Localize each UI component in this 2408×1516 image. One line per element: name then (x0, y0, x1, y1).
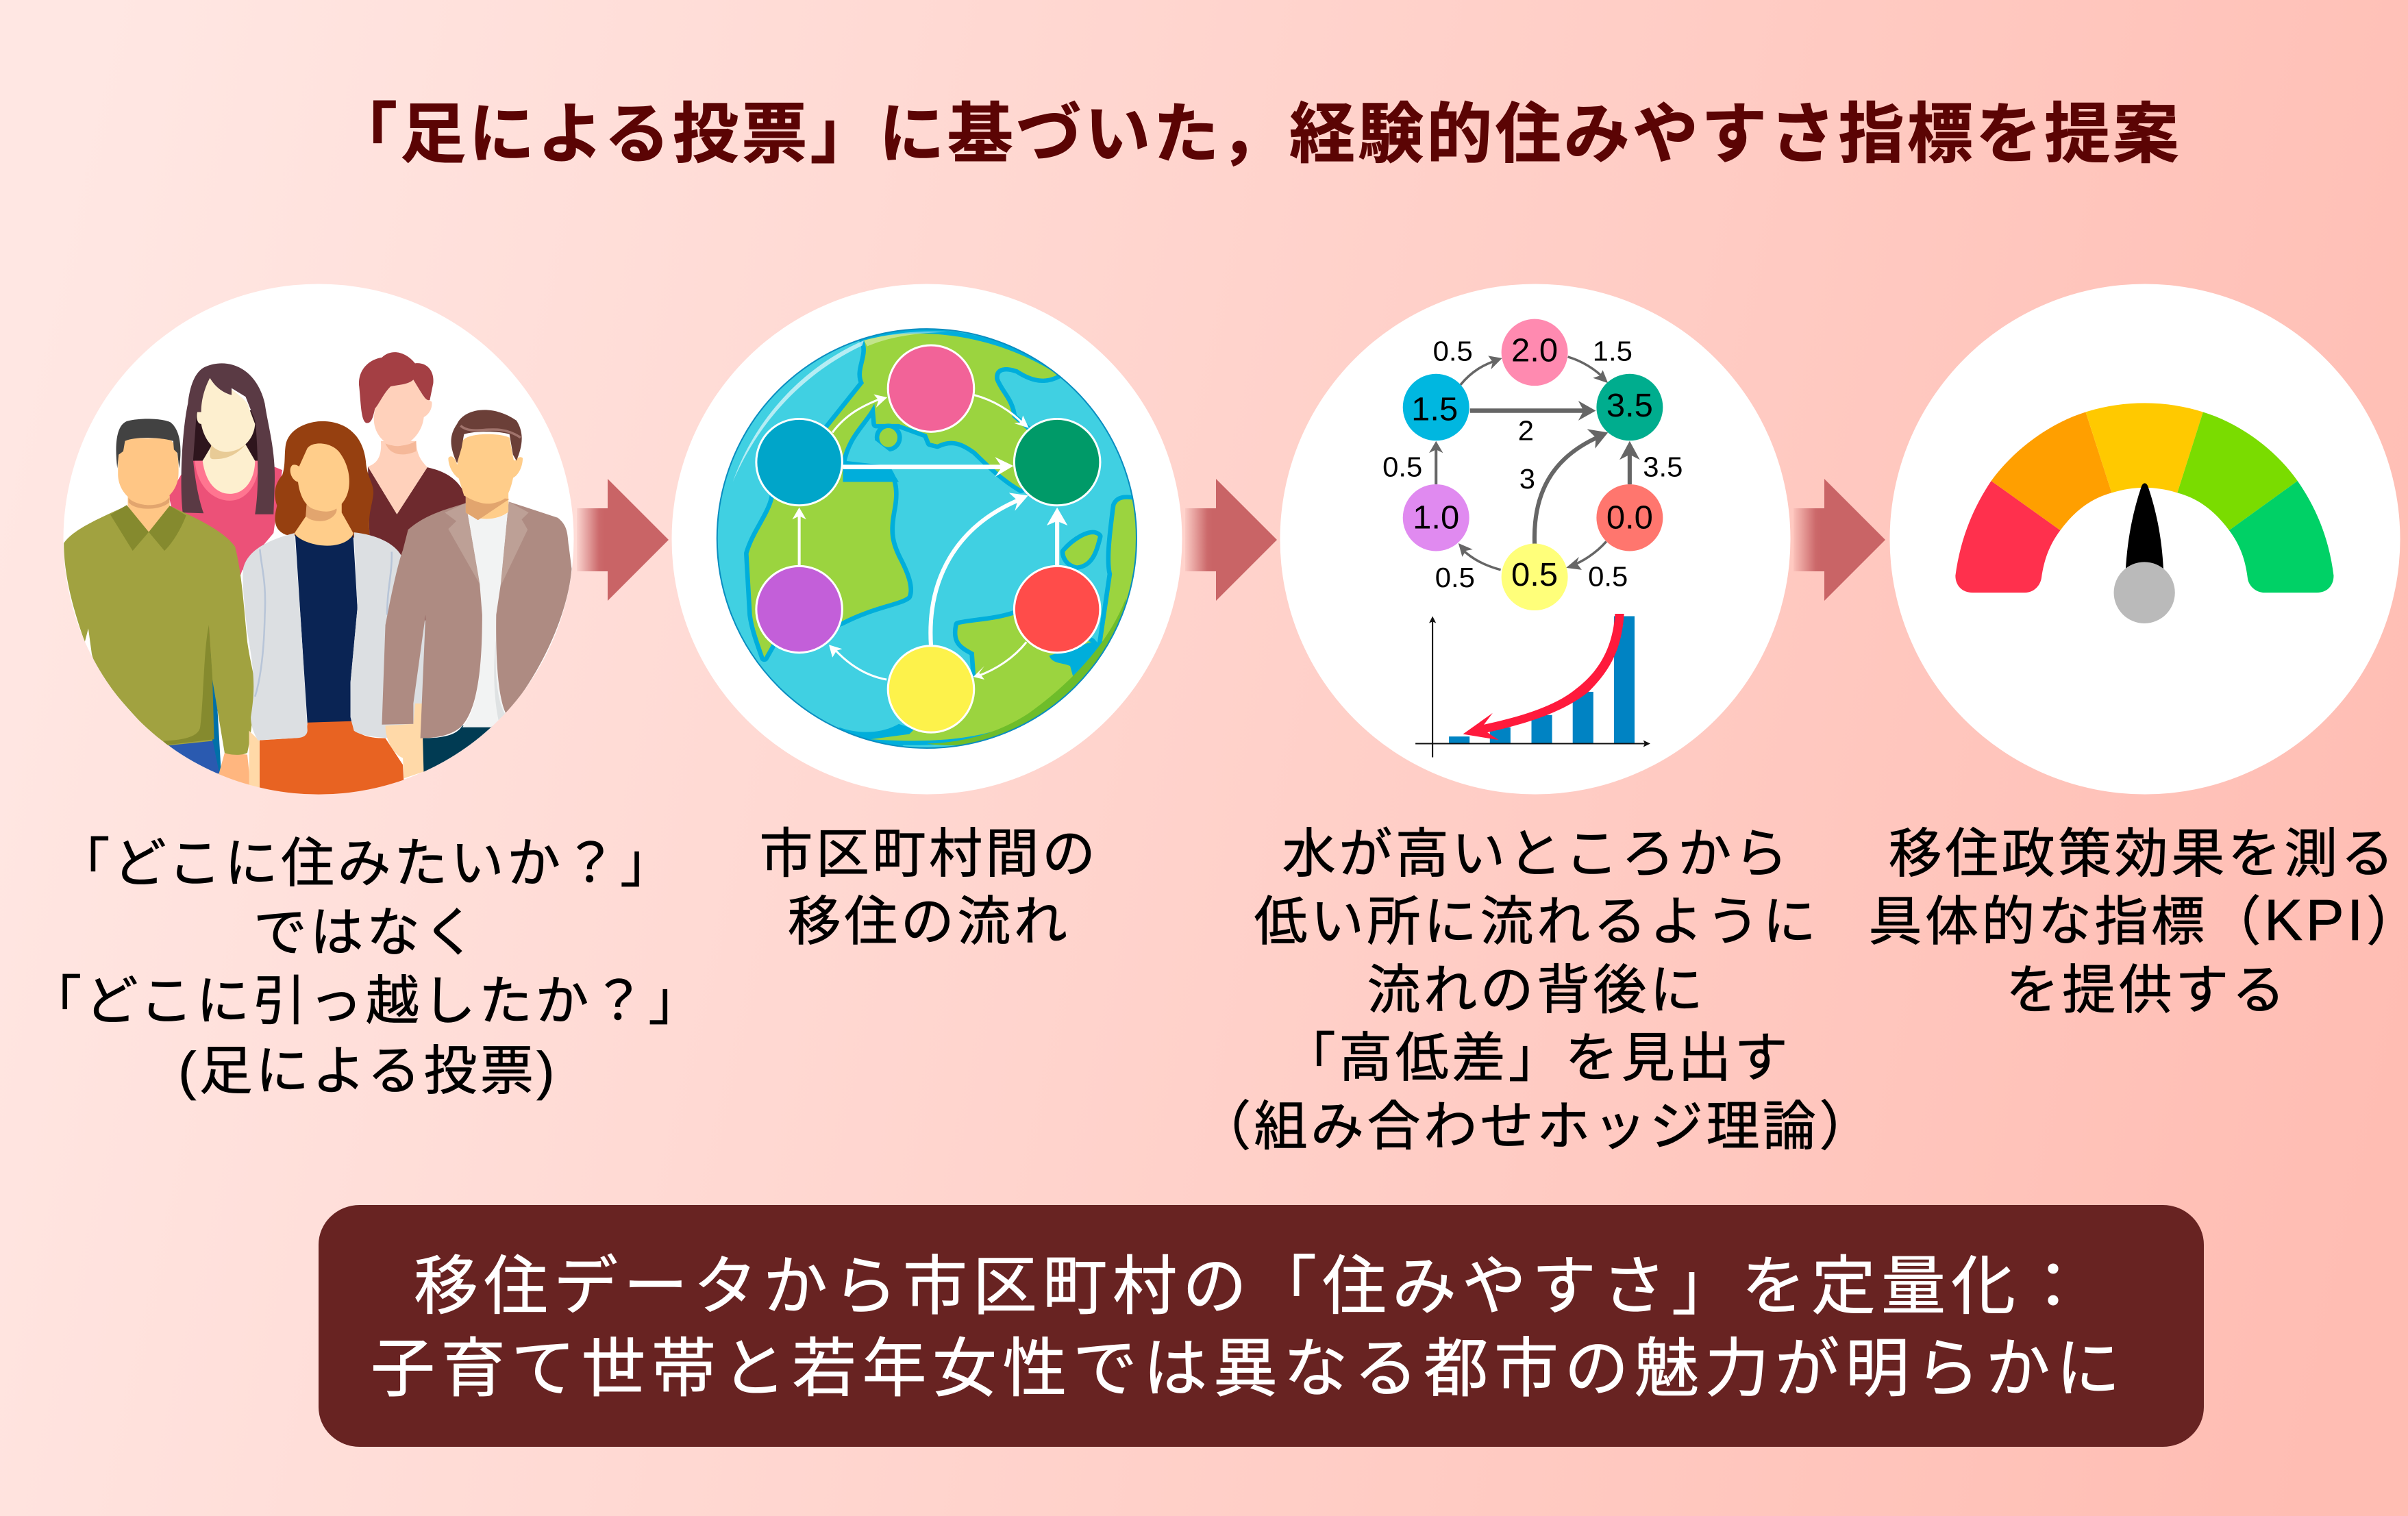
text block: column 2: 市区町村間の (759, 823, 1099, 884)
edge weights: 0.5 (1588, 561, 1628, 593)
arrow: graph to gauge (1793, 479, 1885, 601)
callout: conclusion: 子育て世帯と若年女性では異なる都市の魅力が明らかに (371, 1332, 2126, 1404)
callout: conclusion: 移住データから市区町村の「住みやすさ」を定量化： (414, 1250, 2091, 1322)
edge weights: 0.5 (1382, 451, 1422, 482)
node values: 2.0 (1511, 332, 1558, 369)
text block: column 1: (足による投票) (178, 1041, 558, 1101)
node values: 1.0 (1413, 499, 1459, 536)
text block: column 1 (28, 833, 705, 1101)
node values: 0.0 (1606, 499, 1653, 536)
node values: 0.5 (1511, 557, 1558, 593)
text block: column 1: 「どこに引っ越したか？」 (28, 971, 705, 1031)
callout: conclusion (319, 1205, 2204, 1447)
network arrows (799, 395, 1057, 680)
text block: column 4 (1869, 823, 2408, 1020)
panel: gauge circle (1889, 284, 2400, 795)
node values (1411, 332, 1653, 593)
edge weights: 0.5 (1433, 336, 1473, 366)
text block: column 2 (759, 823, 1099, 952)
icon: gauge meter (1955, 403, 2333, 623)
text block: column 1: ではなく (253, 902, 480, 962)
bar chart (1415, 614, 1650, 757)
edge weights: 3 (1519, 463, 1535, 495)
text block: column 3: 水が高いところから (1282, 823, 1791, 884)
text block: column 1: 「どこに住みたいか？」 (56, 833, 677, 893)
node values: 1.5 (1411, 391, 1458, 427)
red descent arrow (1463, 614, 1624, 740)
arrow: people to globe (577, 479, 669, 601)
title: 「足による投票」に基づいた，経験的住みやすさ指標を提案 (332, 98, 2182, 171)
edge weights (1382, 336, 1683, 593)
arrow: globe to graph (1185, 479, 1277, 601)
edge weights: 3.5 (1643, 451, 1683, 482)
text block: column 3: 低い所に流れるように (1254, 891, 1820, 952)
text block: column 4: 移住政策効果を測る (1889, 823, 2397, 884)
panel: people circle (63, 284, 574, 795)
edge weights: 0.5 (1435, 562, 1475, 593)
panel: potential graph circle (1280, 284, 1791, 795)
text block: column 2: 移住の流れ (788, 891, 1070, 952)
graph nodes (1403, 319, 1663, 610)
text block: column 4: を提供する (2006, 960, 2288, 1020)
node values: 3.5 (1606, 388, 1653, 424)
icon: globe with migration network (717, 329, 1140, 748)
text block: column 3: 「高低差」を見出す (1282, 1028, 1791, 1088)
panel: globe circle (671, 284, 1182, 795)
network nodes (756, 345, 1100, 732)
text block: column 4: 具体的な指標（KPI） (1869, 888, 2408, 952)
text block: column 3: 流れの背後に (1367, 960, 1706, 1020)
graph arrows (1429, 356, 1640, 570)
text block: column 3 (1197, 823, 1876, 1156)
text block: column 3: （組み合わせホッジ理論） (1197, 1096, 1876, 1156)
edge weights: 2 (1518, 415, 1534, 446)
edge weights: 1.5 (1593, 336, 1633, 366)
icon: group of people (64, 352, 571, 795)
